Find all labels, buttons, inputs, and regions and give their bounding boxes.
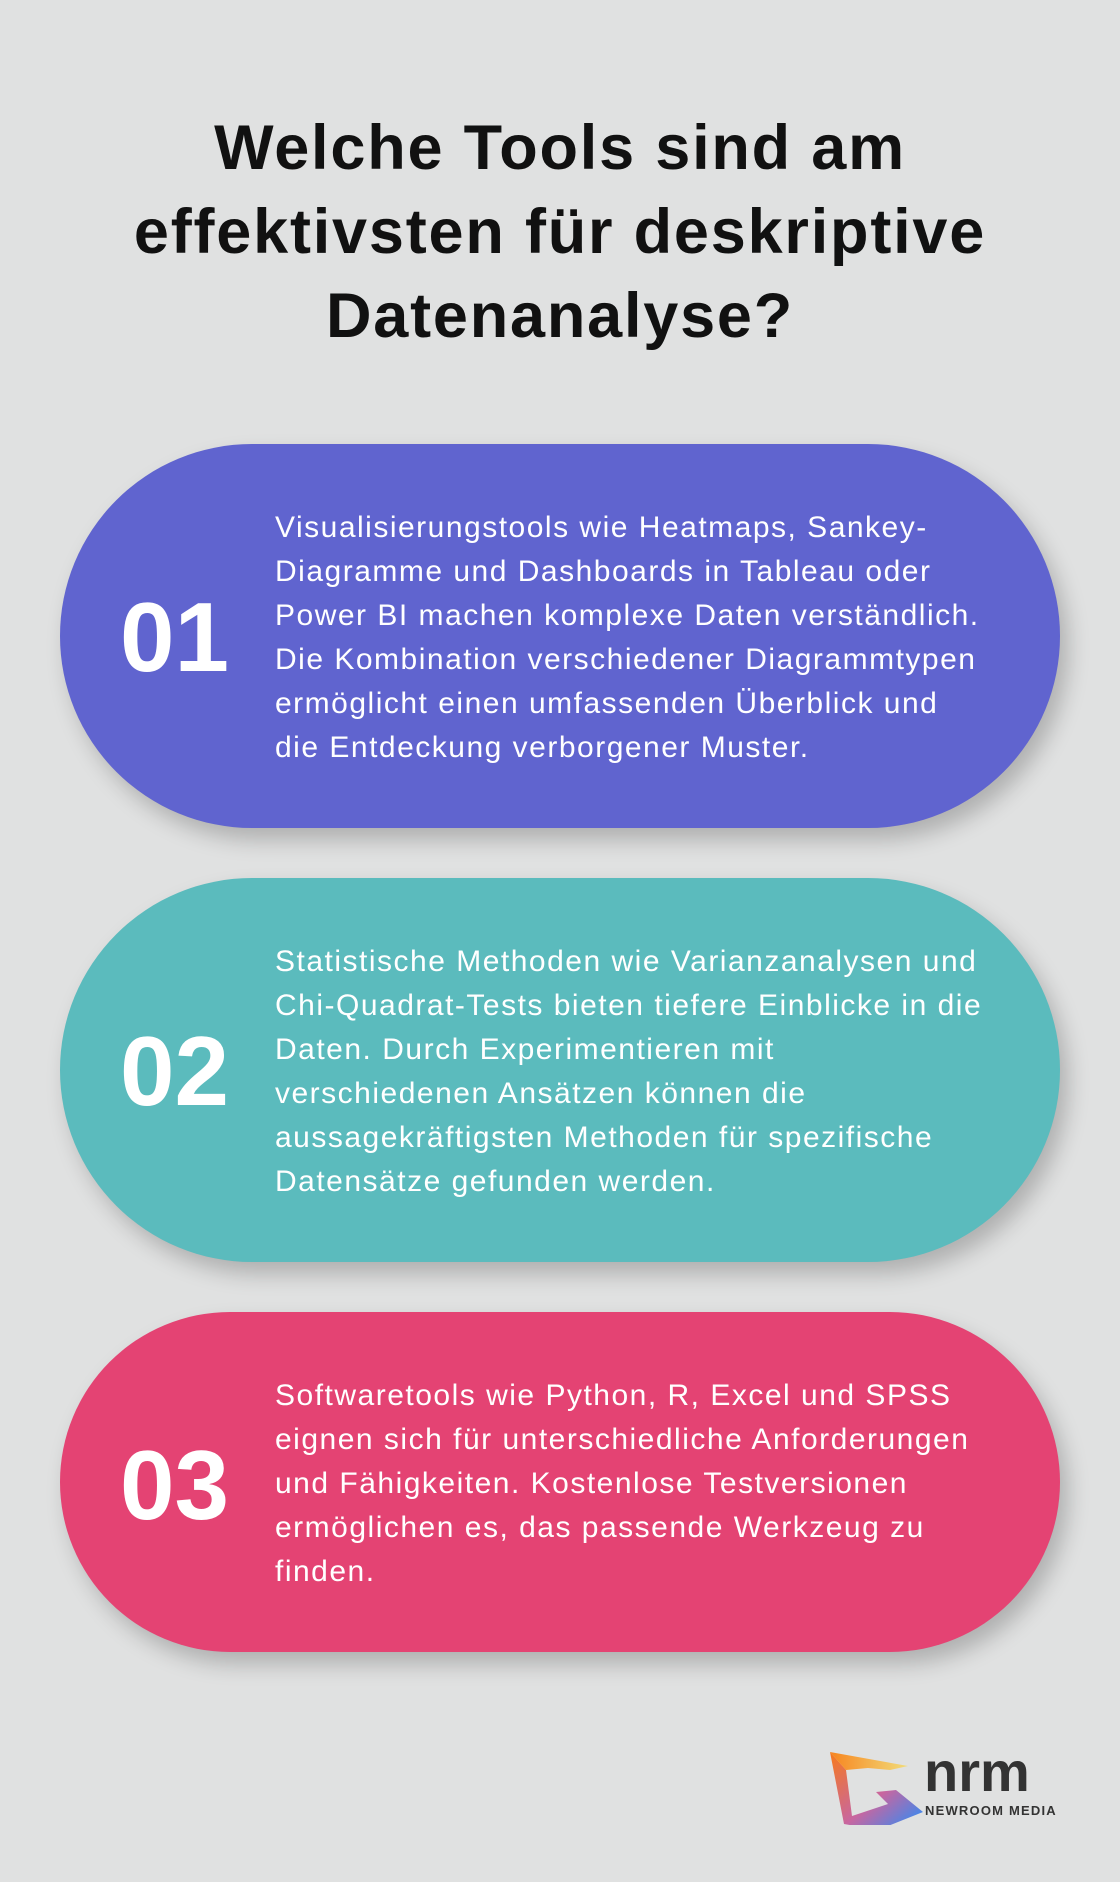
text 01: Power BI machen komplexe Daten verständlich.: [275, 599, 980, 632]
text 03: eignen sich für unterschiedliche Anforderungen: [275, 1423, 969, 1456]
text 02: Datensätze gefunden werden.: [275, 1165, 716, 1198]
text 02: Chi-Quadrat-Tests bieten tiefere Einblicke in die: [275, 989, 982, 1022]
text 03: und Fähigkeiten. Kostenlose Testversionen: [275, 1467, 908, 1500]
text 01: die Entdeckung verborgener Muster.: [275, 731, 810, 764]
title: Datenanalyse?: [326, 281, 794, 351]
icon: nrm logo mark: [830, 1752, 923, 1825]
logo text: nrm: [924, 1740, 1030, 1803]
text 01: Die Kombination verschiedener Diagrammtypen: [275, 643, 976, 676]
number 02: 02: [120, 1016, 229, 1126]
text 02: Daten. Durch Experimentieren mit: [275, 1033, 775, 1066]
number 03: 03: [120, 1430, 229, 1540]
panel: 03: [60, 1312, 1060, 1652]
logo: [830, 1740, 1057, 1825]
text 01: Diagramme und Dashboards in Tableau oder: [275, 555, 931, 588]
number 01: 01: [120, 582, 229, 692]
text 01: [275, 511, 980, 764]
title: effektivsten für deskriptive: [134, 197, 986, 267]
panel: 01: [60, 444, 1060, 828]
text 02: [275, 945, 982, 1198]
text 03: ermöglichen es, das passende Werkzeug zu: [275, 1511, 925, 1544]
text 01: ermöglicht einen umfassenden Überblick und: [275, 687, 938, 720]
panel: 02: [60, 878, 1060, 1262]
text 02: Statistische Methoden wie Varianzanalysen und: [275, 945, 977, 978]
logo: NEWROOM MEDIA: [925, 1803, 1057, 1818]
text 03: [275, 1379, 969, 1588]
text 02: aussagekräftigsten Methoden für spezifische: [275, 1121, 933, 1154]
text 01: Visualisierungstools wie Heatmaps, Sankey-: [275, 511, 928, 544]
text 03: finden.: [275, 1555, 376, 1588]
text 02: verschiedenen Ansätzen können die: [275, 1077, 807, 1110]
text 03: Softwaretools wie Python, R, Excel und SPSS: [275, 1379, 951, 1412]
title: [134, 113, 986, 351]
title: Welche Tools sind am: [214, 113, 906, 183]
